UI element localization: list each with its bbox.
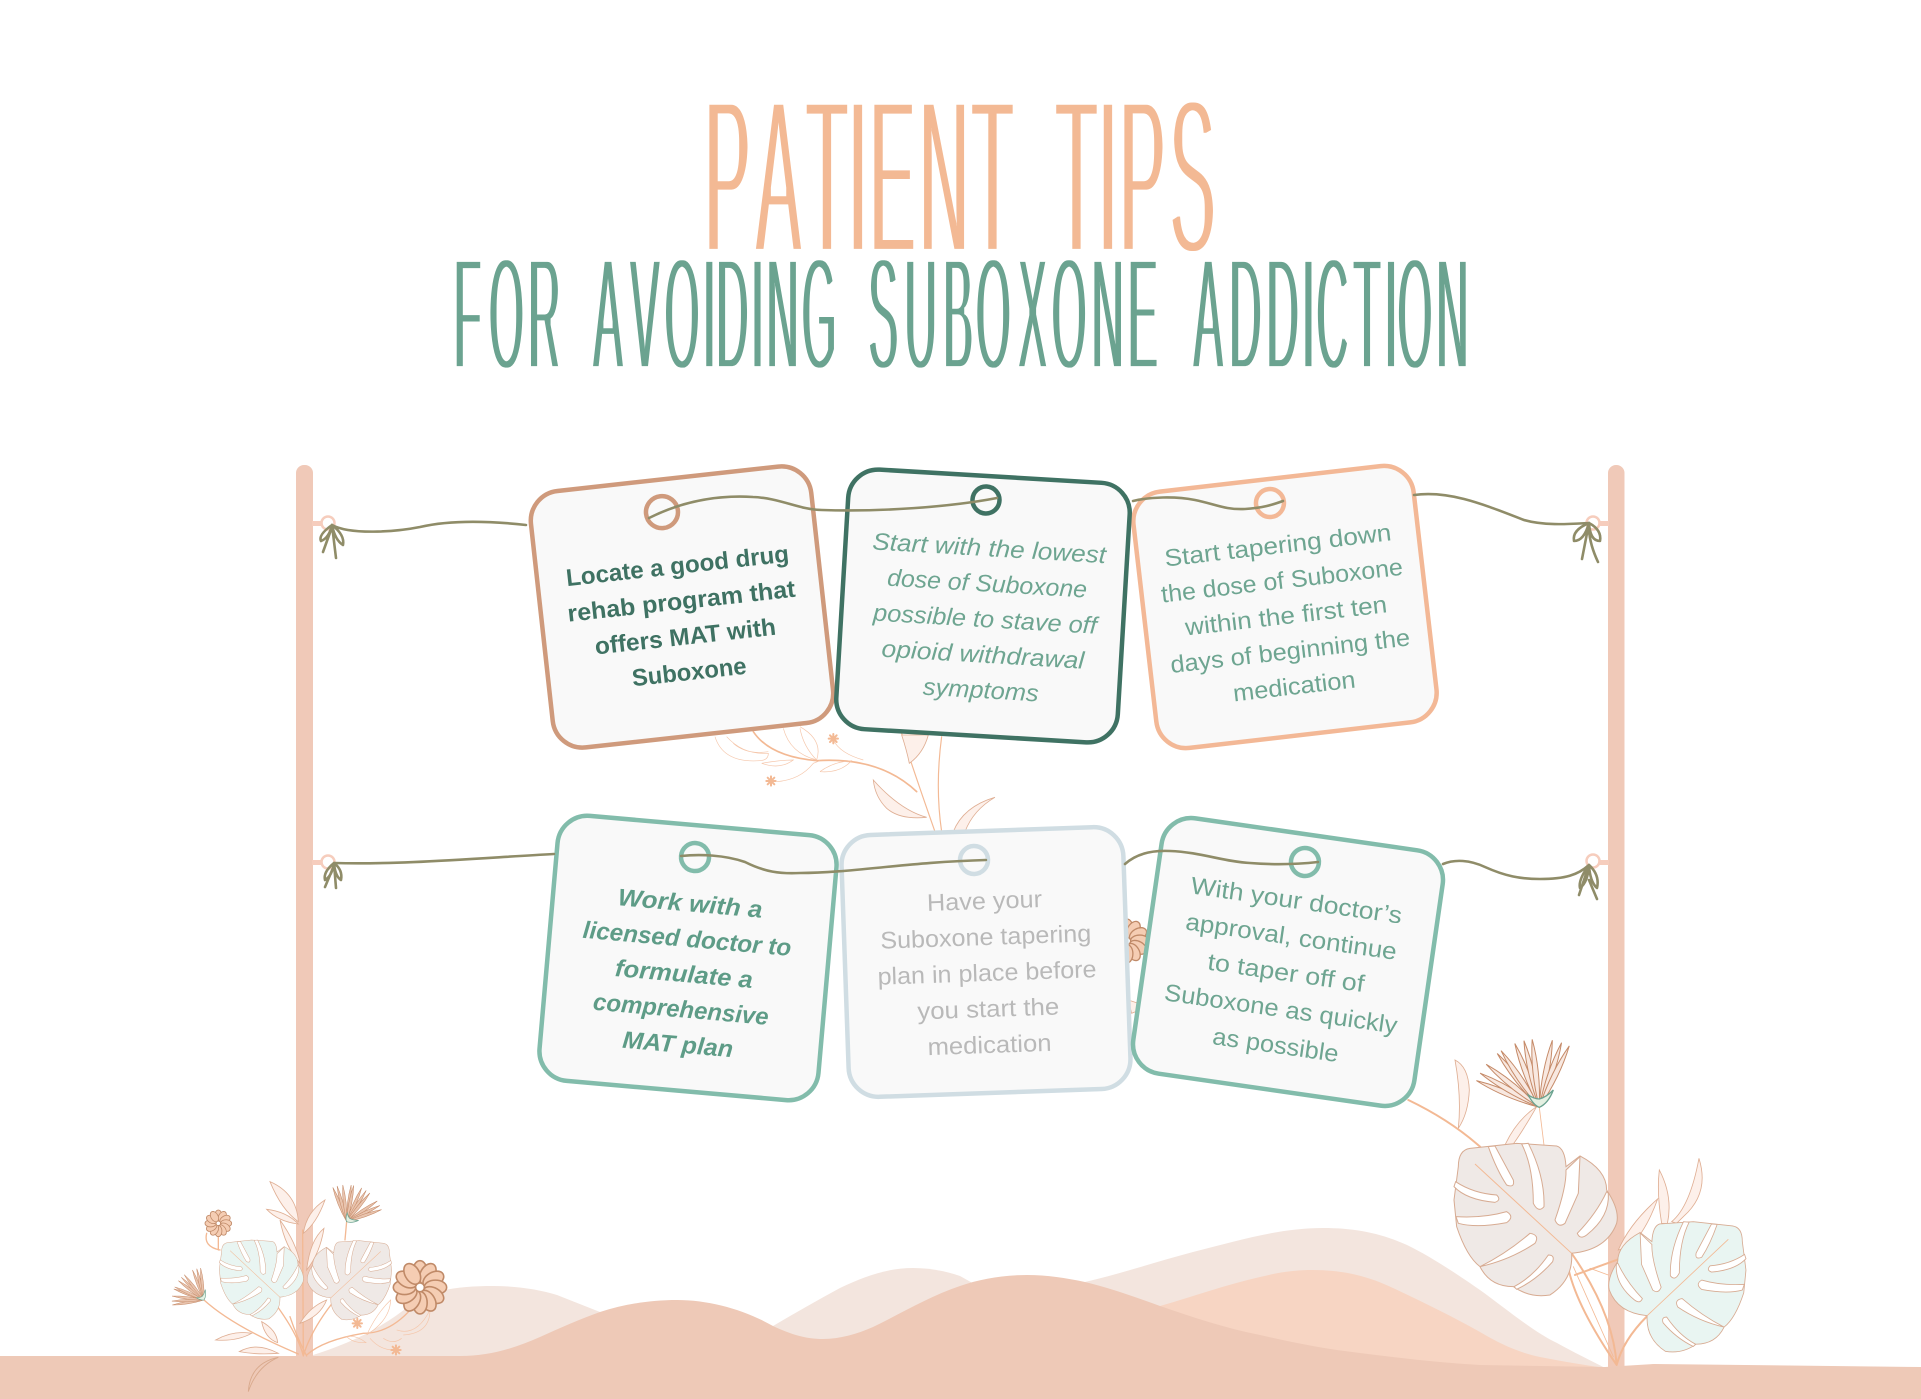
tip text: within the first ten bbox=[1183, 591, 1388, 642]
knot: bottom left bbox=[325, 863, 341, 888]
ground bbox=[0, 1275, 1921, 1399]
knot: top left bbox=[320, 525, 343, 558]
card box bbox=[528, 463, 836, 751]
card 3 bbox=[1130, 463, 1440, 751]
tip text: you start the bbox=[917, 993, 1060, 1025]
main stem bbox=[753, 732, 917, 792]
right plant bbox=[1408, 1039, 1746, 1365]
tip text: Suboxone as quickly bbox=[1163, 979, 1399, 1040]
tip text: licensed doctor to bbox=[582, 917, 792, 962]
palm flower top bbox=[321, 1171, 385, 1235]
outline leaves bbox=[347, 1300, 430, 1350]
hole bbox=[1254, 488, 1285, 519]
card 2 bbox=[835, 468, 1131, 744]
tip text: opioid withdrawal bbox=[881, 636, 1086, 675]
tip text: medication bbox=[927, 1030, 1052, 1061]
bottom clothesline bbox=[334, 851, 1589, 879]
tip text: offers MAT with bbox=[593, 614, 777, 661]
tip text: to taper off of bbox=[1206, 949, 1366, 998]
tip text: approval, continue bbox=[1184, 909, 1399, 966]
hole bbox=[960, 845, 989, 874]
small orange flower bbox=[205, 1210, 232, 1237]
knot: top right bbox=[1574, 523, 1600, 562]
tip text: symptoms bbox=[922, 674, 1039, 707]
teal leaf bbox=[219, 1240, 303, 1319]
tip text: dose of Suboxone bbox=[886, 565, 1088, 604]
tip text: medication bbox=[1232, 666, 1357, 707]
tip text bbox=[573, 881, 795, 1067]
card 1 bbox=[528, 463, 836, 751]
hole bbox=[644, 494, 680, 530]
hole bbox=[972, 486, 1000, 514]
right post bbox=[1608, 465, 1624, 1375]
teal leaf bbox=[1609, 1222, 1746, 1352]
knots bbox=[320, 523, 1600, 899]
background hills bbox=[310, 1228, 1605, 1368]
card 4 bbox=[537, 813, 839, 1103]
card box bbox=[835, 468, 1131, 744]
stems bbox=[204, 1222, 412, 1356]
grey leaf bbox=[1454, 1143, 1617, 1296]
tip text bbox=[875, 884, 1099, 1063]
tip text: as possible bbox=[1211, 1023, 1340, 1068]
outline leaves bbox=[715, 727, 863, 782]
hill: pale left bbox=[310, 1286, 610, 1356]
knot: bottom right bbox=[1579, 865, 1598, 899]
tip text: MAT plan bbox=[621, 1027, 734, 1063]
tip text: the dose of Suboxone bbox=[1160, 554, 1404, 609]
palm flower left bbox=[162, 1265, 217, 1317]
hole bbox=[680, 842, 710, 872]
stems bbox=[1408, 1100, 1652, 1365]
hill: peach right bbox=[1160, 1270, 1605, 1368]
left post bbox=[296, 465, 313, 1365]
left plant bbox=[162, 1171, 447, 1392]
tip text bbox=[1157, 871, 1415, 1076]
card 6 bbox=[1129, 814, 1447, 1110]
tip text: formulate a bbox=[614, 955, 754, 994]
filled leaves bbox=[873, 735, 995, 832]
thin stems bbox=[902, 733, 942, 832]
tip text: days of beginning the bbox=[1169, 624, 1411, 679]
small leaf behind cards bbox=[1128, 1000, 1148, 1013]
palm flower bbox=[1475, 1039, 1572, 1110]
card box bbox=[1130, 463, 1440, 751]
heading: for avoiding suboxone addiction: FOR AVOIDING SUBOXONE ADDICTION bbox=[454, 225, 1468, 403]
post hooks bbox=[312, 516, 1609, 868]
tip text: Have your bbox=[927, 886, 1042, 917]
top clothesline bbox=[332, 494, 1589, 532]
pale side leaves bbox=[216, 1182, 327, 1354]
tip text: Suboxone bbox=[631, 653, 748, 692]
grey leaf bbox=[307, 1241, 392, 1320]
tip text: plan in place before bbox=[877, 956, 1097, 991]
hill: pale right bbox=[1085, 1228, 1605, 1368]
central plant behind cards bbox=[715, 727, 1149, 1013]
card 5 bbox=[841, 826, 1131, 1098]
stars bbox=[353, 1319, 362, 1328]
hill: pale middle bbox=[773, 1268, 985, 1340]
big orange flower bbox=[393, 1261, 447, 1314]
tip text: comprehensive bbox=[592, 989, 770, 1031]
thin stems bbox=[1539, 1107, 1613, 1357]
hole bbox=[1289, 846, 1321, 878]
tip text: Suboxone tapering bbox=[880, 920, 1092, 955]
tip text: Locate a good drug bbox=[565, 541, 790, 592]
card box bbox=[841, 826, 1131, 1098]
tip text: Start with the lowest bbox=[872, 528, 1108, 569]
card box bbox=[1129, 814, 1447, 1110]
tip text bbox=[1156, 519, 1416, 714]
pale leaves bbox=[1455, 1060, 1702, 1250]
card box bbox=[537, 813, 839, 1103]
tip text: Work with a bbox=[617, 884, 764, 924]
tip text bbox=[562, 540, 805, 698]
stars bbox=[829, 734, 838, 743]
tip text: possible to stave off bbox=[871, 599, 1100, 640]
tip text bbox=[863, 528, 1108, 711]
tip text: rehab program that bbox=[566, 576, 797, 628]
title bbox=[454, 53, 1468, 403]
tip text: Start tapering down bbox=[1163, 519, 1393, 572]
tip text: With your doctor’s bbox=[1189, 873, 1404, 930]
heading: patient tips: PATIENT TIPS bbox=[705, 53, 1215, 300]
root leaf bbox=[248, 1357, 278, 1392]
flower behind cards bbox=[1105, 919, 1149, 963]
